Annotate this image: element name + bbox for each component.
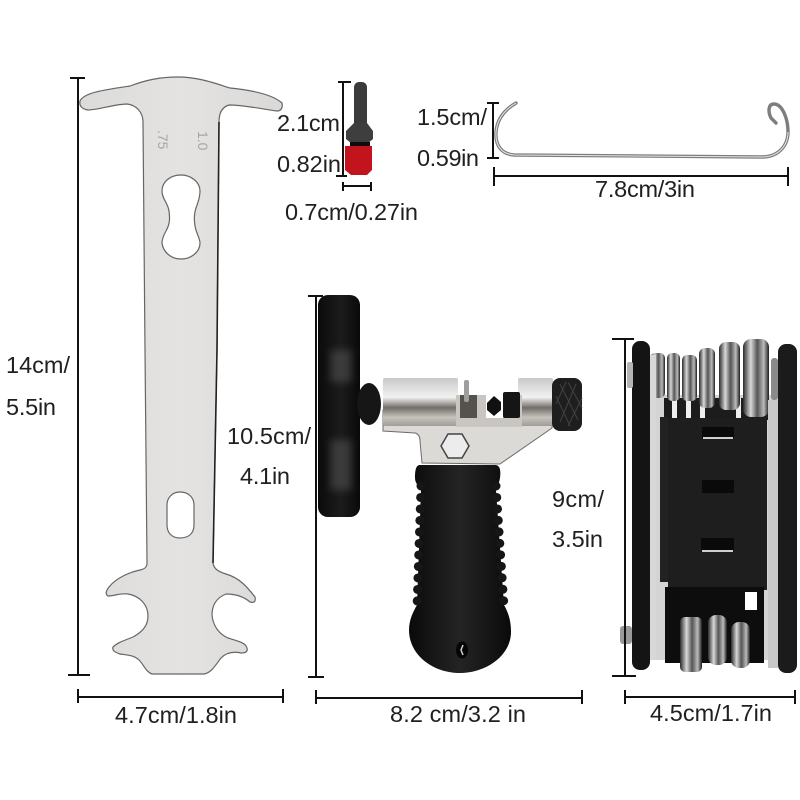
steel body bbox=[383, 410, 552, 464]
label: 0.82in: 0.82in bbox=[277, 151, 341, 177]
backing bbox=[650, 395, 778, 660]
label: pin width: 0.7cm/0.27in bbox=[285, 199, 418, 225]
engraved mark 1.0: 1.0 bbox=[195, 131, 211, 151]
dimension: checker width bbox=[78, 689, 283, 703]
grip ridges left bbox=[417, 486, 421, 606]
dimension: hook width bbox=[494, 167, 788, 186]
centre black plate bbox=[668, 418, 767, 590]
wheel highlights bbox=[331, 350, 351, 490]
side plate right bbox=[778, 344, 797, 673]
ball joint bbox=[357, 383, 381, 425]
label: 14cm: 14cm/ bbox=[6, 352, 70, 378]
plate slots bbox=[701, 427, 734, 552]
wheel handle bbox=[318, 295, 360, 517]
dimension: breaker width bbox=[316, 690, 582, 704]
screws bbox=[620, 626, 632, 644]
dimension: pin width bbox=[343, 182, 371, 191]
bottom fold-out bits bbox=[680, 617, 702, 672]
dimension: multi-tool width bbox=[625, 690, 795, 704]
label: checker width: 4.7cm/1.8in bbox=[115, 702, 237, 728]
label: 5.5in: 5.5in bbox=[6, 394, 56, 420]
shaft shadow edge bbox=[213, 122, 219, 563]
dimension: checker height bbox=[68, 78, 90, 675]
side plate left bbox=[632, 341, 650, 670]
top fold-out bits bbox=[650, 353, 665, 398]
hex hole bbox=[441, 434, 469, 458]
dimension: hook height bbox=[487, 103, 499, 158]
dimension: multi-tool height bbox=[612, 339, 636, 676]
label: 3.5in: 3.5in bbox=[552, 526, 603, 552]
grip ridges right bbox=[496, 486, 504, 606]
label: hook width: 7.8cm/3in bbox=[595, 176, 695, 202]
folding multi-tool bbox=[620, 339, 797, 673]
label: 1.5cm: 1.5cm/ bbox=[417, 104, 487, 130]
lanyard hole bbox=[456, 642, 468, 658]
label: 2.1cm: 2.1cm bbox=[277, 110, 340, 136]
label: breaker width: 8.2 cm/3.2 in bbox=[390, 701, 526, 727]
chain checker tool bbox=[80, 77, 282, 674]
knurled knob bbox=[552, 378, 582, 431]
engraved mark 0.75: .75 bbox=[155, 130, 171, 150]
chain rivet pin bbox=[345, 82, 373, 175]
bottom black section bbox=[665, 587, 764, 663]
rubber grip bbox=[409, 465, 511, 673]
label: multi-tool width: 4.5cm/1.7in bbox=[650, 700, 772, 726]
label: 10.5cm: 10.5cm/ bbox=[227, 423, 311, 449]
chain breaker tool bbox=[318, 295, 582, 673]
slots bbox=[460, 395, 477, 418]
spoke hook bbox=[496, 103, 788, 157]
label: 4.1in: 4.1in bbox=[240, 463, 290, 489]
dimension: breaker height bbox=[308, 296, 324, 677]
label: 0.59in: 0.59in bbox=[417, 145, 479, 171]
dimension: pin height bbox=[336, 82, 351, 176]
label: 9cm: 9cm/ bbox=[552, 486, 604, 512]
